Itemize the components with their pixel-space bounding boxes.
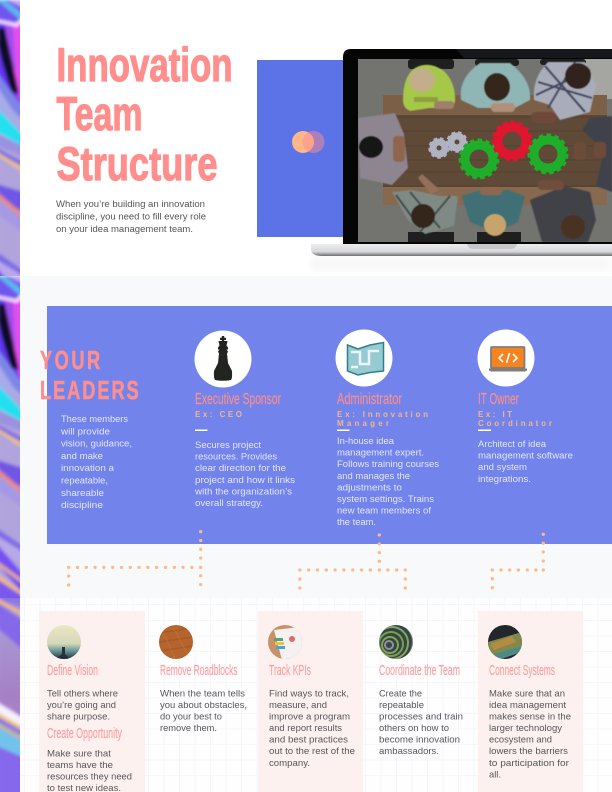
leader: executive sponsor: overall strategy.	[195, 498, 263, 509]
card: connect systems: lowers the barriers	[489, 746, 568, 757]
card: define vision and create opportunity: Create Opportunity	[47, 725, 122, 742]
leader: administrator: and manages the	[337, 471, 410, 482]
team meeting photo	[358, 59, 612, 242]
person: plaid shirt	[531, 62, 596, 123]
leader: it owner	[478, 330, 573, 485]
leader: it owner: IT Owner	[478, 391, 519, 408]
card: define vision and create opportunity: Define Vision	[47, 662, 98, 679]
card: coordinate the team: become innovation	[379, 735, 460, 746]
card: define vision and create opportunity: share purpose.	[47, 712, 110, 723]
leader: administrator: adjustments to	[337, 482, 402, 493]
card: remove roadblocks: remove them.	[160, 723, 217, 734]
title: Structure	[56, 137, 218, 190]
person: right, dark plaid	[574, 116, 612, 192]
dotted connector 3	[492, 534, 543, 588]
leader: executive sponsor: clear direction for the	[195, 463, 286, 474]
card background 1	[39, 611, 145, 792]
table	[383, 115, 607, 187]
icon: chess king	[194, 330, 252, 388]
dotted connector 2	[300, 535, 405, 588]
leader: administrator: management expert.	[337, 448, 424, 459]
leader: it owner: integrations.	[478, 474, 531, 485]
person: teal shirt	[461, 63, 530, 112]
leader: executive sponsor: Secures project	[195, 440, 261, 451]
card: connect systems: to participation for	[489, 758, 570, 769]
person: bottom right	[530, 180, 596, 242]
title: Innovation	[56, 38, 232, 91]
person: lime shirt	[403, 65, 455, 111]
leader: administrator: new team members of	[337, 506, 431, 517]
leaders intro text: discipline	[61, 500, 103, 511]
card: coordinate the team: processes and train	[379, 712, 463, 723]
card: remove roadblocks	[159, 625, 247, 734]
section background: responsibilities grid	[20, 598, 612, 792]
leader: administrator: Manager	[337, 419, 389, 428]
card background 5	[478, 611, 583, 792]
panel: your leaders	[47, 306, 612, 544]
card: track kpis: out to the rest of the	[269, 746, 355, 757]
card: track kpis: and report results	[269, 723, 342, 734]
card: track kpis: improve a program	[269, 712, 350, 723]
person: bottom middle	[462, 187, 525, 236]
card: connect systems: idea management	[489, 700, 566, 711]
card: coordinate the team: repeatable	[379, 700, 424, 711]
card: coordinate the team	[379, 625, 462, 754]
leaders intro text: These members	[61, 414, 128, 425]
leaders intro text: and make	[61, 451, 103, 462]
card: define vision and create opportunity: you’re going and	[47, 700, 116, 711]
card: track kpis: Find ways to track,	[269, 688, 349, 700]
decorative holographic strip	[0, 0, 20, 792]
section background: leaders	[20, 276, 612, 598]
card: track kpis: company.	[269, 758, 310, 769]
heading: your leaders: YOUR	[40, 346, 100, 375]
card: connect systems: ecosystem and	[489, 735, 552, 746]
leader: executive sponsor: Executive Sponsor	[195, 391, 281, 408]
dotted connector 1	[69, 532, 201, 585]
image: iridescent texture	[488, 625, 522, 660]
leader: administrator: Administrator	[337, 391, 402, 408]
laptop with photo	[311, 49, 612, 270]
leader: administrator: the team.	[337, 517, 376, 528]
leaders intro text: vision, guidance,	[61, 439, 132, 450]
intro text: on your idea management team.	[56, 224, 193, 235]
card: track kpis: Track KPIs	[269, 662, 311, 679]
blue accent panel	[257, 60, 343, 237]
intro text	[56, 199, 206, 235]
gears	[430, 122, 567, 178]
card: remove roadblocks: When the team tells	[160, 688, 245, 700]
leader: administrator: Follows training courses	[337, 459, 439, 470]
image: charts on desk	[268, 625, 304, 660]
card: connect systems	[488, 625, 571, 780]
leader: administrator: system settings. Trains	[337, 494, 434, 505]
card: coordinate the team: ambassadors.	[379, 746, 439, 757]
card: define vision and create opportunity: Tell others where	[47, 688, 118, 700]
card: connect systems: all.	[489, 769, 501, 780]
card: define vision and create opportunity: Make sure that	[47, 748, 111, 760]
leader: executive sponsor: project and how it links	[195, 475, 295, 486]
leader: executive sponsor: with the organization’s	[194, 486, 292, 497]
leader: administrator: In-house idea	[337, 436, 395, 447]
card: remove roadblocks: do your best to	[160, 712, 222, 723]
card background 3	[258, 611, 363, 792]
leader: it owner: management software	[478, 451, 573, 462]
icon: map	[336, 330, 392, 386]
icon: laptop code	[478, 330, 534, 386]
intro text: When you’re building an innovation	[56, 199, 205, 210]
card: remove roadblocks: Remove Roadblocks	[160, 662, 238, 679]
card: track kpis: and best practices	[269, 735, 348, 746]
leader: administrator	[336, 330, 439, 528]
laptop base	[311, 244, 612, 270]
person: left, grey sweater	[358, 113, 408, 185]
card: coordinate the team: Coordinate the Team	[379, 662, 460, 679]
laptop screen bezel	[343, 49, 612, 244]
title	[56, 38, 232, 190]
card: remove roadblocks: you about obstacles,	[160, 700, 247, 711]
leaders intro text: repeatable,	[61, 476, 108, 486]
card: track kpis: measure, and	[269, 700, 327, 711]
image: concentric rings	[379, 625, 413, 659]
card: connect systems: Make sure that an	[489, 688, 565, 700]
card: connect systems: makes sense in the	[489, 712, 571, 723]
leaders intro text: innovation a	[61, 463, 115, 474]
leader: it owner: Ex: IT	[478, 410, 512, 419]
camera housing	[456, 49, 612, 58]
chairs	[408, 59, 586, 242]
icon: overlapping circles	[292, 131, 324, 153]
leaders intro text	[60, 414, 132, 511]
leader: it owner: Architect of idea	[478, 439, 547, 450]
card: coordinate the team: others on how to	[379, 723, 449, 734]
leaders intro text: shareable	[61, 488, 104, 499]
leader: administrator: Ex: Innovation	[337, 410, 428, 419]
leader: executive sponsor	[194, 330, 295, 509]
card: coordinate the team: Create the	[379, 688, 422, 700]
title: Team	[56, 87, 142, 140]
heading: your leaders	[40, 346, 139, 405]
leader: executive sponsor: resources. Provides	[195, 452, 277, 463]
card: connect systems: Connect Systems	[489, 662, 555, 679]
leaders intro text: will provide	[60, 426, 110, 437]
leader: executive sponsor: Ex: CEO	[195, 410, 242, 419]
card: connect systems: larger technology	[489, 723, 562, 734]
intro text: discipline, you need to fill every role	[56, 212, 206, 222]
person: bottom left	[392, 174, 458, 234]
leader: it owner: Coordinator	[478, 419, 552, 428]
leader: it owner: and system	[478, 462, 527, 473]
heading: your leaders: LEADERS	[40, 376, 139, 405]
image: horizon landscape	[47, 625, 81, 659]
card: define vision and create opportunity: resources they need	[47, 772, 132, 783]
image: brick texture	[159, 625, 193, 659]
card: define vision and create opportunity: teams have the	[47, 760, 113, 771]
card: track kpis	[268, 625, 355, 769]
card: define vision and create opportunity	[47, 625, 132, 792]
